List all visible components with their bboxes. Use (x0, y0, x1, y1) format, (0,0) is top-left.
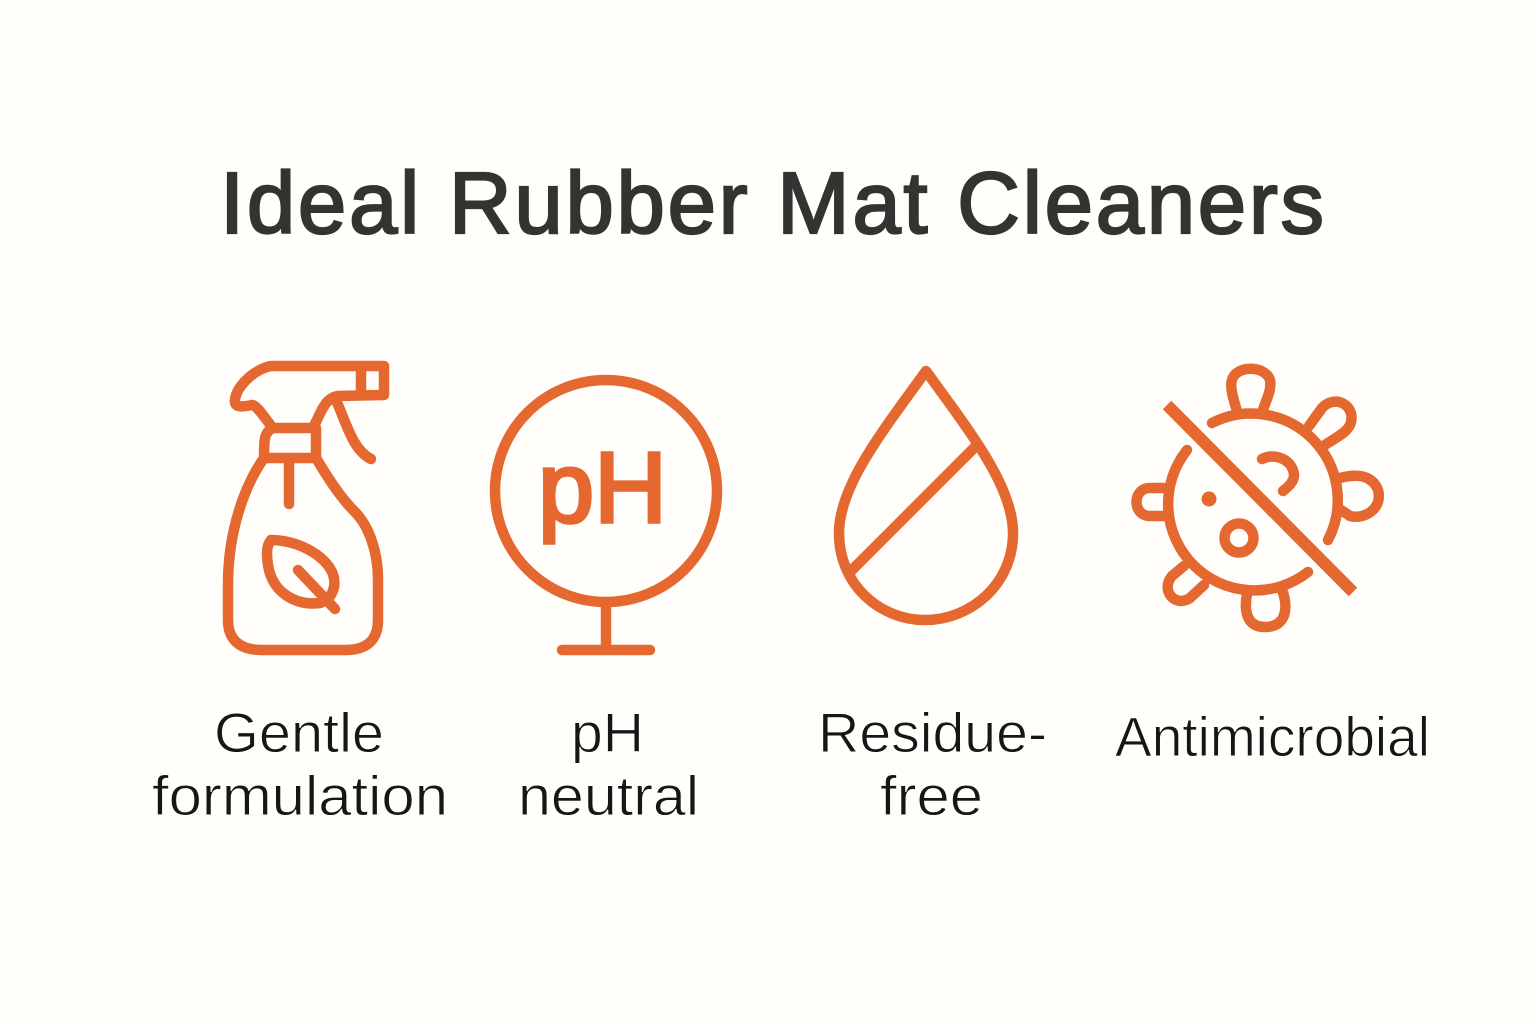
icon: pH meter: pH (538, 432, 667, 544)
label: Gentle formulation: Gentle (214, 701, 384, 764)
label: Residue-free: Residue- (818, 701, 1047, 764)
label: pH neutral (518, 701, 699, 827)
label: Residue-free (818, 701, 1047, 827)
label: Antimicrobial: Antimicrobial (1115, 705, 1430, 768)
icon: spray bottle with leaf (228, 366, 384, 650)
label: Gentle formulation: formulation (152, 764, 448, 827)
title: Ideal Rubber Mat Cleaners (220, 155, 1324, 252)
icon: pH meter (495, 380, 717, 650)
label: Residue-free: free (880, 764, 983, 827)
label: pH neutral: pH (571, 701, 644, 764)
icon: half-filled water drop (839, 371, 1013, 620)
label: Gentle formulation (152, 701, 448, 827)
icon: crossed-out microbe (1136, 369, 1379, 627)
label: pH neutral: neutral (518, 764, 699, 827)
